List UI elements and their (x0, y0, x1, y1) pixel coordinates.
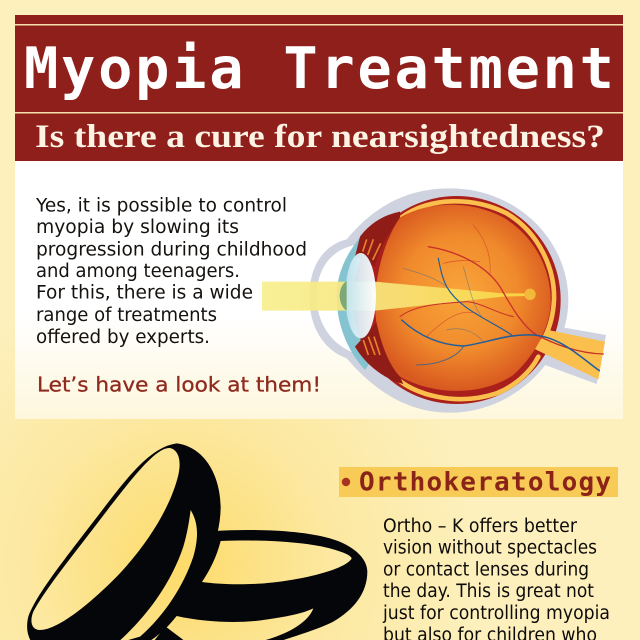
light beam (262, 282, 530, 311)
intro text (35, 196, 307, 348)
iris (340, 281, 347, 311)
retina lower arc (395, 357, 538, 399)
intro text: progression during childhood (36, 240, 307, 260)
icon: contact lenses (27, 443, 367, 640)
call to action: Let’s have a look at them! (37, 372, 321, 396)
retina upper arc (402, 201, 554, 337)
optic nerve (543, 327, 606, 384)
intro text: and among teenagers. (36, 261, 240, 282)
ciliary muscle: lower (355, 323, 403, 384)
bullet (342, 478, 350, 486)
section heading: Orthokeratology: Orthokeratology (359, 468, 611, 498)
title: Myopia Treatment (24, 36, 614, 102)
title banner (15, 15, 623, 161)
panel: introduction (15, 161, 623, 419)
text: orthokeratology description: the day. This is great not (383, 581, 594, 602)
intro text: range of treatments (36, 305, 217, 326)
subtitle: Is there a cure for nearsightedness? (35, 119, 605, 155)
text: orthokeratology description (382, 516, 610, 640)
intro text: myopia by slowing its (36, 217, 239, 238)
lens (345, 253, 376, 338)
intro text: Yes, it is possible to control (35, 196, 287, 216)
icon: eye cross-section (262, 188, 606, 413)
choroid (353, 196, 561, 404)
focus point (524, 289, 536, 300)
intro text: For this, there is a wide (36, 282, 253, 304)
cornea (337, 233, 372, 370)
back lens (147, 530, 367, 640)
cornea opening (317, 245, 355, 353)
intro text: offered by experts. (36, 327, 210, 348)
ciliary muscle: upper (355, 212, 400, 267)
text: orthokeratology description: vision without spectacles (383, 538, 597, 558)
text: orthokeratology description: or contact lenses during (383, 560, 589, 580)
eyeball interior (375, 205, 551, 391)
sclera (309, 188, 568, 413)
arteries (400, 225, 603, 354)
veins (402, 258, 599, 371)
text: orthokeratology description: just for controlling myopia (382, 603, 610, 624)
ciliary muscle stripes (363, 239, 381, 355)
front lens (27, 443, 221, 640)
text: orthokeratology description: Ortho – K offers better (383, 516, 577, 537)
